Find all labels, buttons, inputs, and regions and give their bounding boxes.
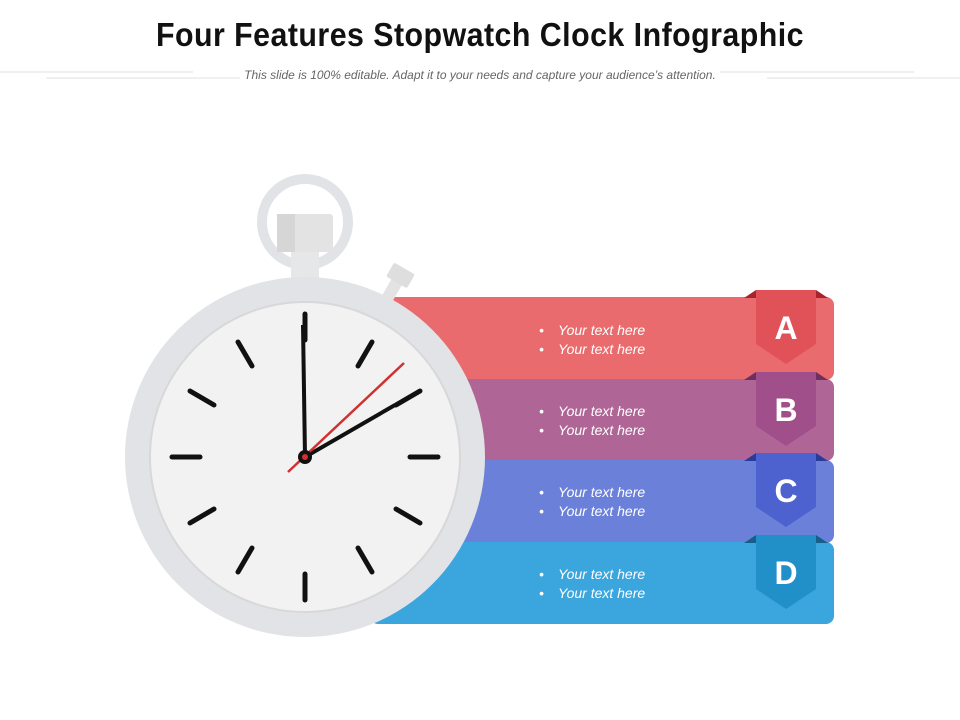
stopwatch: [125, 179, 485, 637]
bar C: [370, 460, 834, 543]
badge D: [744, 535, 828, 609]
bar A: [370, 297, 834, 380]
badges: [744, 290, 828, 609]
bar C: Your text here: [558, 503, 645, 519]
bar A: Your text here: [558, 322, 645, 338]
bar D: •: [539, 585, 544, 601]
bar C: •: [539, 503, 544, 519]
bar C: •: [539, 484, 544, 500]
badge C: C: [774, 473, 798, 509]
bar D: Your text here: [558, 585, 645, 601]
bar B: Your text here: [558, 422, 645, 438]
bar A: Your text here: [558, 341, 645, 357]
bar B: •: [539, 403, 544, 419]
badge A: A: [774, 310, 798, 346]
badge C: [744, 453, 828, 527]
badge D: D: [774, 555, 798, 591]
badge B: [744, 372, 828, 446]
bar D: Your text here: [558, 566, 645, 582]
badge B: B: [774, 392, 798, 428]
bar B: •: [539, 422, 544, 438]
bar D: [370, 542, 834, 624]
subtitle: This slide is 100% editable. Adapt it to your needs and capture your audience’s attention.: [244, 68, 716, 82]
bars: [370, 297, 834, 624]
title: Four Features Stopwatch Clock Infographic: [156, 16, 804, 53]
hands: [303, 325, 305, 457]
bar A: •: [539, 341, 544, 357]
bar D: •: [539, 566, 544, 582]
badge A: [744, 290, 828, 364]
bar B: Your text here: [558, 403, 645, 419]
bar C: Your text here: [558, 484, 645, 500]
bar B: [370, 379, 834, 461]
bar A: •: [539, 322, 544, 338]
